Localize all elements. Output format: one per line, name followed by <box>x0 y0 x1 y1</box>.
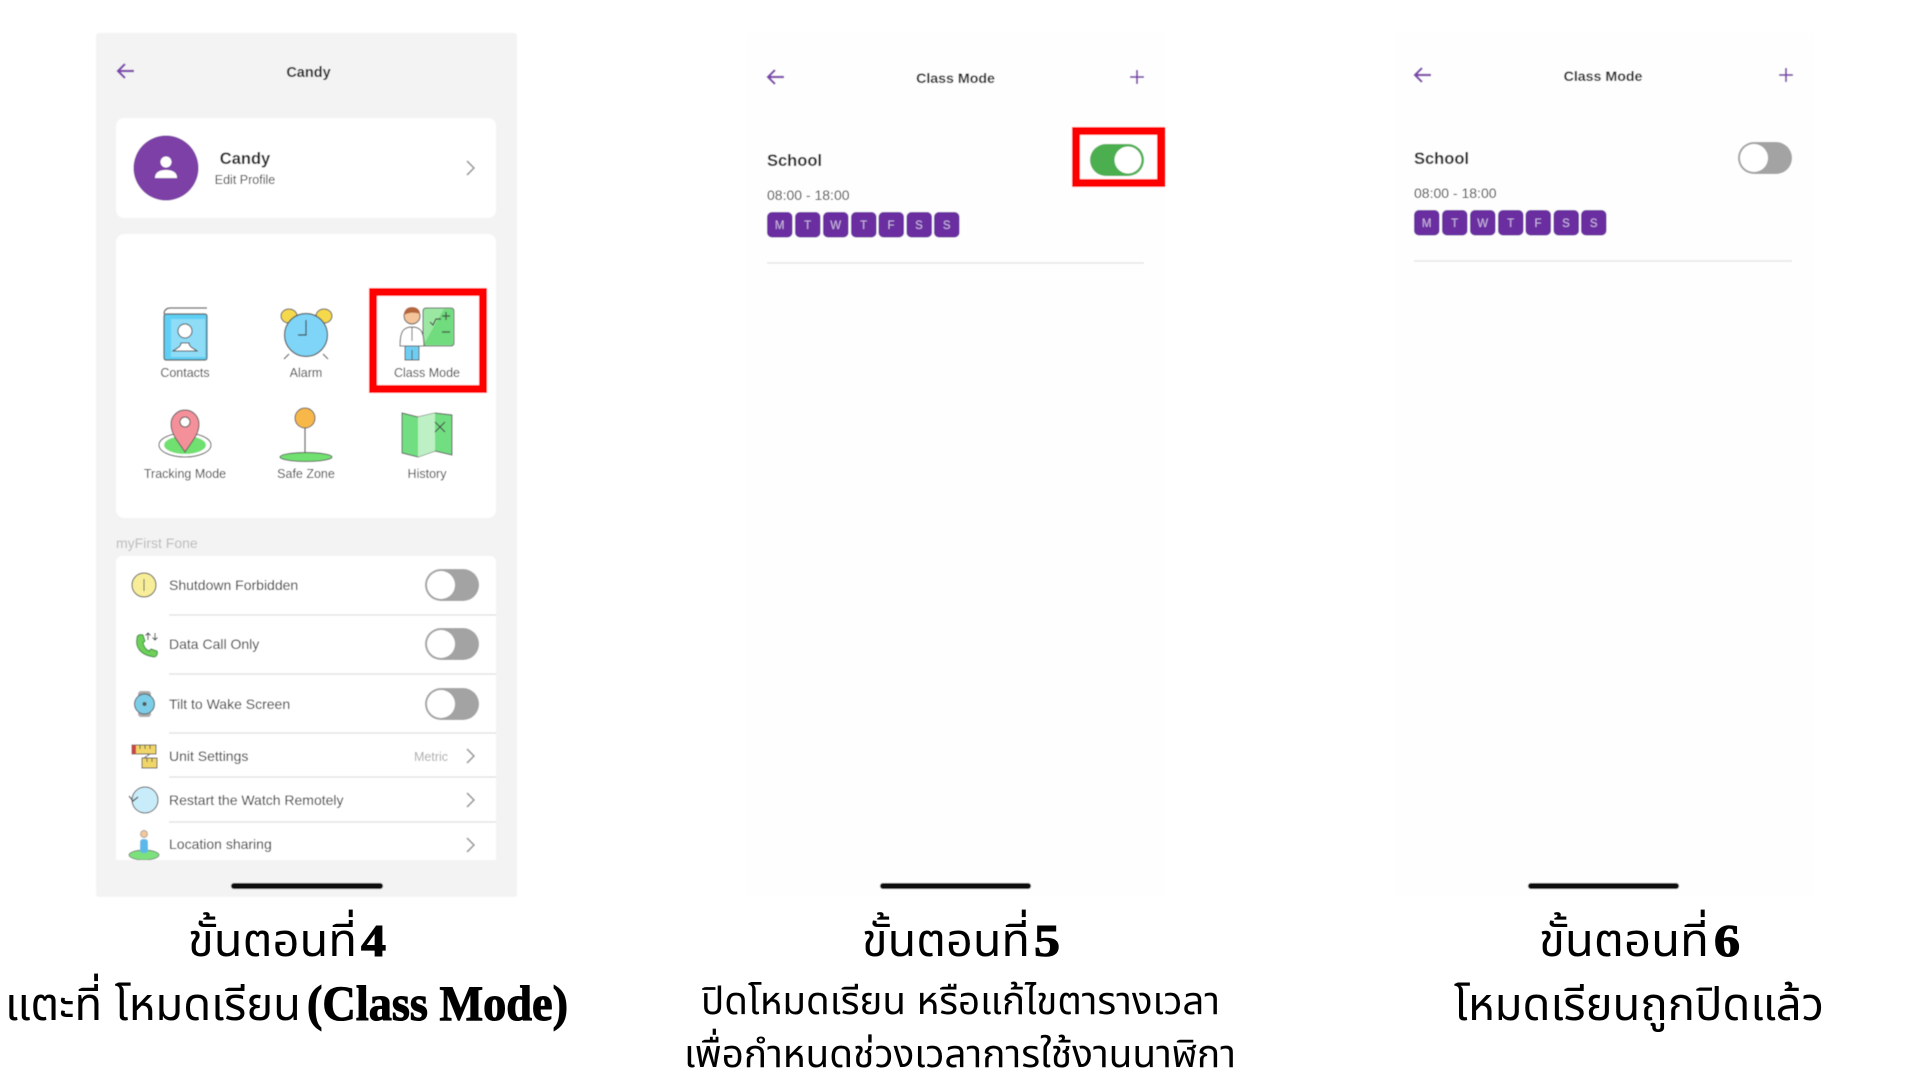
home indicator step 6 <box>1528 883 1679 889</box>
panel: phone screen step 5 <box>745 33 1165 897</box>
row: Data Call Only: Data Call Only <box>169 636 259 652</box>
text: Safe Zone: Safe Zone <box>277 467 335 481</box>
text: Contacts: Contacts <box>160 366 210 380</box>
row: Unit Settings: Metric <box>414 750 448 764</box>
icon: back arrow <box>768 70 784 84</box>
text: step 4 description: แตะที่ โหมดเรียน <box>5 973 301 1030</box>
row: Location sharing <box>129 830 474 860</box>
day chips: S <box>915 220 923 232</box>
icon: tracking mode <box>159 410 211 457</box>
icon: alarm clock <box>281 309 332 359</box>
icon: history map <box>402 413 452 457</box>
day chips: T <box>860 220 867 232</box>
heading: step 4: ขั้นตอนที่ <box>188 909 357 966</box>
icon: safe zone <box>280 408 332 462</box>
day chips <box>1414 210 1606 236</box>
row: Restart the Watch Remotely <box>129 787 474 813</box>
icon: plus <box>1130 70 1144 84</box>
icon: avatar <box>134 136 198 200</box>
day chips: M <box>1422 218 1431 230</box>
text: Candy profile name: Candy <box>220 150 271 168</box>
heading: Class Mode: Class Mode <box>916 71 995 87</box>
heading: Candy: Candy <box>286 65 331 81</box>
text: Tracking Mode: Tracking Mode <box>144 467 226 481</box>
row: Location sharing: Location sharing <box>169 836 272 852</box>
panel: profile card <box>116 118 496 218</box>
highlight: red box on toggle <box>1076 131 1161 183</box>
text: myFirst Fone section label: myFirst Fone <box>116 535 198 551</box>
heading: step 5: ขั้นตอนที่ <box>862 909 1030 966</box>
text: step 5 description line 1: ปิดโหมดเรียน หรือแก้ไขตารางเวลา <box>701 981 1220 1023</box>
icon: chevron <box>467 161 474 175</box>
day chips: S <box>1590 218 1598 230</box>
day chips: F <box>1534 218 1542 230</box>
panel: phone screen step 6 <box>1395 33 1815 897</box>
caption: step 6 <box>1454 909 1824 1032</box>
text: Alarm: Alarm <box>290 366 322 380</box>
text: Edit Profile: Edit Profile <box>215 173 275 187</box>
caption: step 4 <box>5 909 568 1031</box>
icon: back arrow <box>1415 68 1431 82</box>
icon: plus <box>1779 68 1793 82</box>
heading: step 6: ขั้นตอนที่ <box>1539 909 1709 966</box>
toggle on <box>1090 144 1144 176</box>
panel: feature grid <box>116 234 496 518</box>
row: Tilt to Wake Screen: Tilt to Wake Screen <box>169 696 290 712</box>
panel: phone screen step 4 <box>96 33 517 897</box>
caption: step 5 <box>684 909 1236 1076</box>
row: Unit Settings <box>132 745 474 768</box>
icon: contacts <box>164 308 207 360</box>
row: Restart the Watch Remotely: Restart the Watch Remotely <box>169 792 344 808</box>
heading: step 6: 6 <box>1714 915 1740 966</box>
text: School: School <box>767 152 822 170</box>
row: Shutdown Forbidden <box>132 569 479 601</box>
day chips: T <box>1451 218 1458 230</box>
day chips <box>767 212 960 238</box>
home indicator step 4 <box>231 883 383 889</box>
row: Tilt to Wake Screen <box>134 688 479 720</box>
row: Data Call Only <box>137 628 479 660</box>
home indicator step 5 <box>880 883 1031 889</box>
day chips: T <box>1507 218 1514 230</box>
heading: step 4: 4 <box>361 915 386 966</box>
day chips: S <box>1562 218 1570 230</box>
heading: step 5: 5 <box>1034 915 1060 966</box>
icon: class mode teacher <box>400 307 454 360</box>
panel: settings list <box>116 556 496 876</box>
toggle off <box>1738 142 1792 174</box>
day chips: S <box>943 220 951 232</box>
day chips: F <box>887 220 895 232</box>
text: time range: 08:00 - 18:00 <box>1414 185 1497 201</box>
text: School: School <box>1414 150 1469 168</box>
text: Class Mode: Class Mode <box>394 366 460 380</box>
day chips: M <box>775 220 784 232</box>
row: Unit Settings: Unit Settings <box>169 748 248 764</box>
heading: Class Mode: Class Mode <box>1564 69 1643 85</box>
text: History: History <box>408 467 447 481</box>
day chips: T <box>804 220 811 232</box>
row: Shutdown Forbidden: Shutdown Forbidden <box>169 577 298 593</box>
text: step 5 description line 2: เพื่อกำหนดช่วงเวลาการใช้งานนาฬิกา <box>684 1028 1236 1076</box>
text: time range: 08:00 - 18:00 <box>767 187 850 203</box>
text: step 4 description <box>5 973 568 1031</box>
highlight: red box on Class Mode <box>373 292 483 389</box>
day chips: W <box>830 220 841 232</box>
day chips: W <box>1477 218 1488 230</box>
icon: back arrow <box>118 64 134 78</box>
text: step 4 description: (Class Mode) <box>307 975 568 1031</box>
text: step 6 description: โหมดเรียนถูกปิดแล้ว <box>1454 978 1824 1032</box>
